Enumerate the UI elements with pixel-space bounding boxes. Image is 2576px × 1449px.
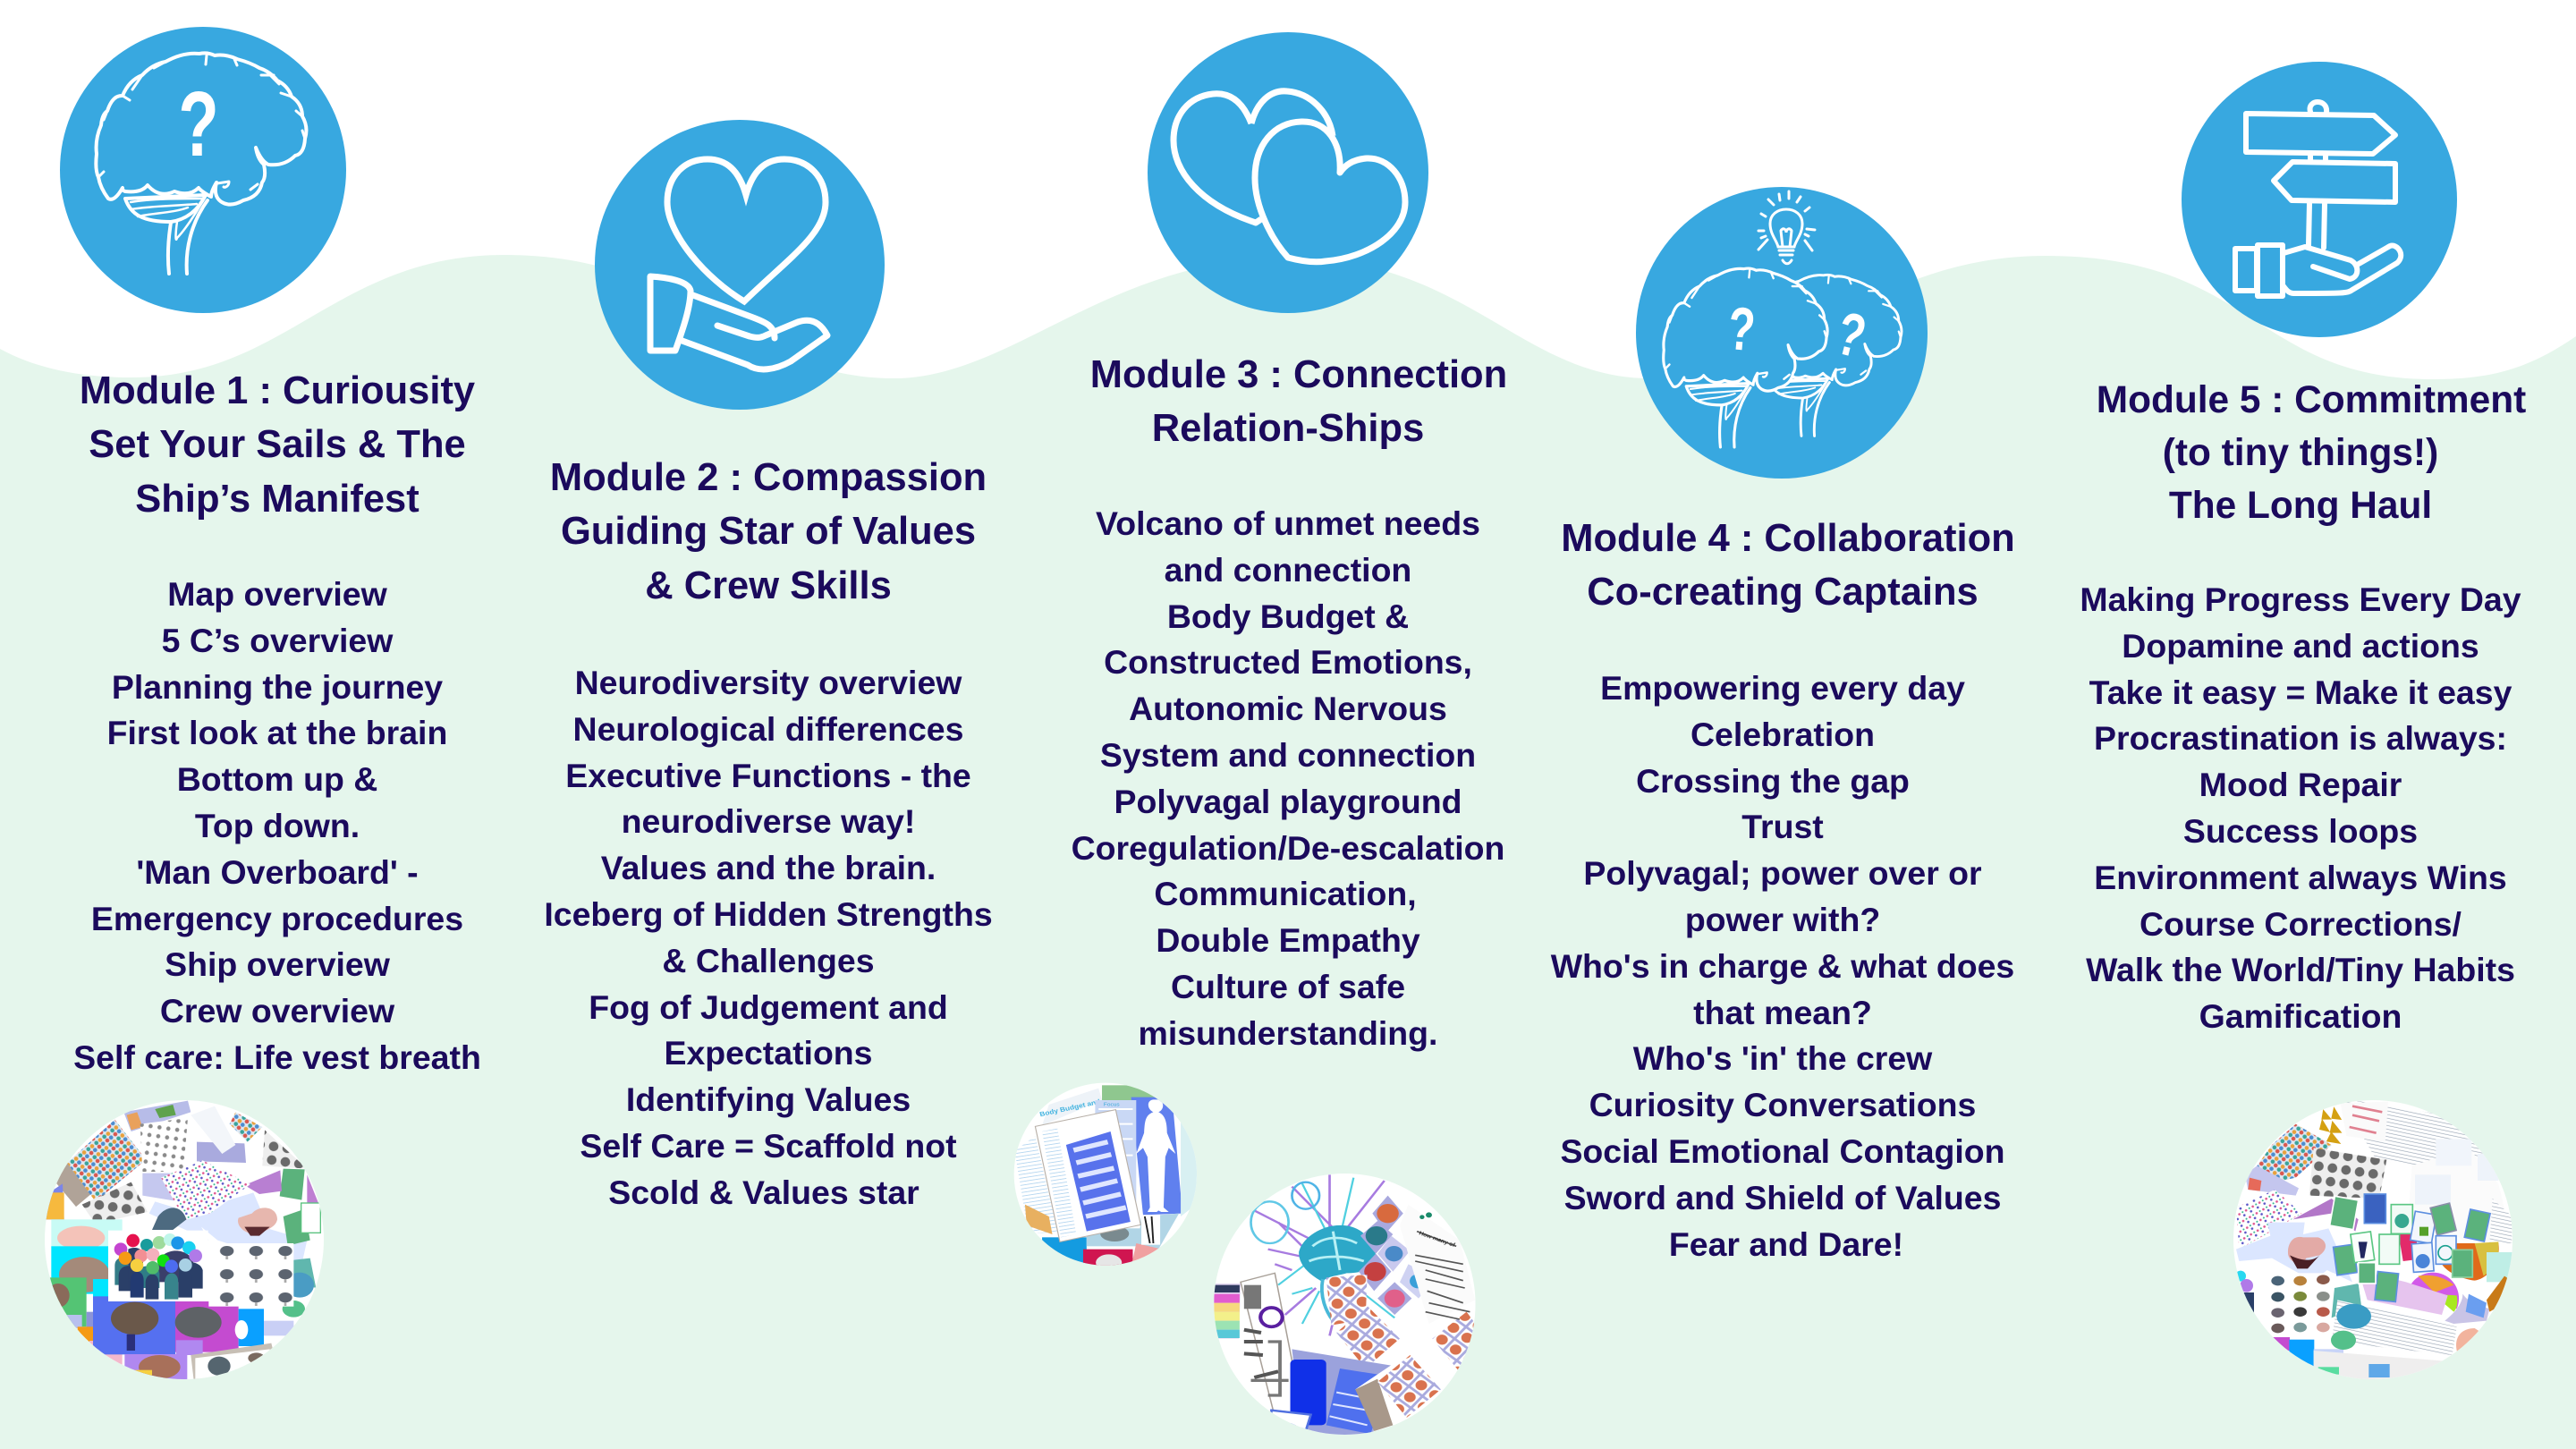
text block: module 3 topics: System and connection: [1100, 736, 1476, 774]
text block: module 3 topics: Culture of safe: [1171, 968, 1405, 1005]
text block: module 3 topics: Constructed Emotions,: [1104, 643, 1472, 681]
collage: body budget materials: [1013, 1082, 1198, 1271]
text block: module 3 topics: misunderstanding.: [1139, 1014, 1437, 1052]
text block: module 4 topics: Who's 'in' the crew: [1633, 1039, 1932, 1077]
text block: module 1 topics: Emergency procedures: [91, 900, 463, 937]
heading: module 5: (to tiny things!): [2163, 431, 2438, 473]
heading: module 3: Relation-Ships: [1152, 407, 1424, 450]
icon: signpost on open hand: [2182, 62, 2457, 337]
text block: module 2 topics: Values and the brain.: [601, 849, 936, 886]
heading: module 1: Module 1 : Curiousity: [80, 369, 475, 412]
text block: module 3 topics: Coregulation/De-escalation: [1072, 829, 1504, 867]
collage: neural brain materials: [1213, 1174, 1477, 1436]
text block: module 5 topics: Mood Repair: [2199, 766, 2402, 803]
heading: module 3: [1090, 353, 1507, 450]
text block: module 2 topics: Iceberg of Hidden Strengths: [544, 895, 993, 933]
text block: module 1 topics: 5 C’s overview: [162, 622, 393, 659]
text block: module 2 topics: Scold & Values star: [608, 1174, 919, 1211]
text block: module 4 topics: Polyvagal; power over or: [1583, 854, 1982, 892]
text block: module 5 topics: [2080, 580, 2521, 1035]
collage: body budget materials: Body Budget and Mood: [1038, 1093, 1123, 1118]
text block: module 4 topics: Who's in charge & what does: [1551, 947, 2014, 985]
icon: two overlapping hearts: [1148, 32, 1428, 313]
collage: module 1 materials: [45, 1100, 325, 1381]
heading: module 5: The Long Haul: [2169, 484, 2432, 526]
text block: module 1 topics: Planning the journey: [112, 668, 443, 706]
text block: module 1 topics: Ship overview: [165, 945, 390, 983]
text block: module 4 topics: Trust: [1741, 808, 1824, 845]
text block: module 4 topics: power with?: [1685, 901, 1880, 938]
text block: module 2 topics: Expectations: [664, 1034, 873, 1072]
text block: module 4 topics: [1551, 669, 2014, 1263]
text block: module 5 topics: Gamification: [2199, 997, 2402, 1035]
icon: brain with question mark: [60, 27, 346, 313]
icon: two brains and a light bulb: ?: [1725, 293, 1758, 364]
text block: module 2 topics: Identifying Values: [626, 1080, 911, 1118]
heading: module 3: Module 3 : Connection: [1090, 353, 1507, 396]
text block: module 5 topics: Success loops: [2183, 812, 2418, 850]
text block: module 2 topics: [544, 664, 993, 1211]
icon: brain with question mark: ?: [178, 73, 219, 176]
heading: module 4: [1561, 517, 2015, 614]
text block: module 1 topics: [73, 575, 481, 1076]
collage: body budget materials: Focus: [1104, 1102, 1120, 1108]
text block: module 4 topics: Sword and Shield of Values: [1564, 1179, 2001, 1216]
text block: module 3 topics: Volcano of unmet needs: [1096, 504, 1480, 542]
text block: module 3 topics: Double Empathy: [1156, 921, 1420, 959]
text block: module 4 topics: Curiosity Conversations: [1589, 1086, 1976, 1123]
text block: module 4 topics: Empowering every day: [1600, 669, 1965, 707]
heading: module 1: Set Your Sails & The: [89, 423, 466, 466]
text block: module 5 topics: Take it easy = Make it easy: [2089, 674, 2512, 711]
panel: module 1: [73, 369, 481, 1076]
text block: module 3 topics: Polyvagal playground: [1114, 783, 1462, 820]
panel: module 3: [1072, 353, 1507, 1052]
text block: module 5 topics: Walk the World/Tiny Habits: [2086, 951, 2515, 988]
text block: module 2 topics: Neurodiversity overview: [575, 664, 962, 701]
heading: module 1: Ship’s Manifest: [135, 478, 419, 521]
icon: heart over open hand: [595, 120, 885, 410]
text block: module 2 topics: & Challenges: [662, 942, 875, 979]
heading: module 2: & Crew Skills: [645, 564, 892, 607]
text block: module 1 topics: Map overview: [167, 575, 387, 613]
text block: module 1 topics: Bottom up &: [177, 760, 377, 798]
panel: module 2: [544, 456, 993, 1211]
collage: neural brain materials: How many of: [1418, 1231, 1456, 1249]
text block: module 3 topics: [1072, 504, 1504, 1052]
text block: module 4 topics: Social Emotional Contagion: [1560, 1132, 2005, 1170]
text block: module 5 topics: Procrastination is always:: [2094, 719, 2507, 757]
text block: module 3 topics: Autonomic Nervous: [1129, 690, 1447, 727]
heading: module 1: [80, 369, 475, 521]
text block: module 1 topics: First look at the brain: [107, 714, 447, 751]
collage: commitment materials: [2233, 1100, 2513, 1380]
heading: module 2: Module 2 : Compassion: [550, 456, 987, 499]
text block: module 1 topics: Self care: Life vest breath: [73, 1038, 481, 1076]
text block: module 3 topics: Communication,: [1154, 875, 1417, 912]
heading: module 2: Guiding Star of Values: [561, 510, 976, 553]
text block: module 5 topics: Course Corrections/: [2140, 905, 2462, 943]
text block: module 4 topics: Crossing the gap: [1636, 762, 1910, 800]
panel: module 4: [1551, 517, 2015, 1263]
text block: module 1 topics: Crew overview: [160, 992, 394, 1030]
text block: module 5 topics: Making Progress Every Day: [2080, 580, 2521, 618]
text block: module 3 topics: and connection: [1165, 551, 1411, 589]
text block: module 5 topics: Dopamine and actions: [2122, 627, 2479, 665]
text block: module 2 topics: neurodiverse way!: [622, 802, 915, 840]
heading: module 5: Module 5 : Commitment: [2097, 378, 2526, 420]
text block: module 4 topics: Celebration: [1690, 716, 1875, 753]
text block: module 2 topics: Executive Functions - the: [565, 757, 971, 794]
text block: module 2 topics: Neurological differences: [573, 710, 963, 748]
icon: two brains and a light bulb: [1636, 187, 1928, 479]
panel: module 5: [2080, 378, 2526, 1035]
heading: module 4: Module 4 : Collaboration: [1561, 517, 2015, 560]
text block: module 1 topics: Top down.: [195, 807, 360, 844]
text block: module 3 topics: Body Budget &: [1167, 597, 1409, 635]
heading: module 4: Co-creating Captains: [1587, 571, 1979, 614]
icon: two brains and a light bulb: ?: [1830, 298, 1873, 371]
heading: module 2: [550, 456, 987, 607]
heading: module 5: [2097, 378, 2526, 526]
text block: module 1 topics: 'Man Overboard' -: [136, 853, 419, 891]
text block: module 2 topics: Self Care = Scaffold not: [580, 1127, 957, 1165]
text block: module 4 topics: Fear and Dare!: [1669, 1225, 1903, 1263]
text block: module 2 topics: Fog of Judgement and: [589, 988, 948, 1026]
text block: module 5 topics: Environment always Wins: [2094, 859, 2507, 896]
text block: module 4 topics: that mean?: [1693, 994, 1872, 1031]
